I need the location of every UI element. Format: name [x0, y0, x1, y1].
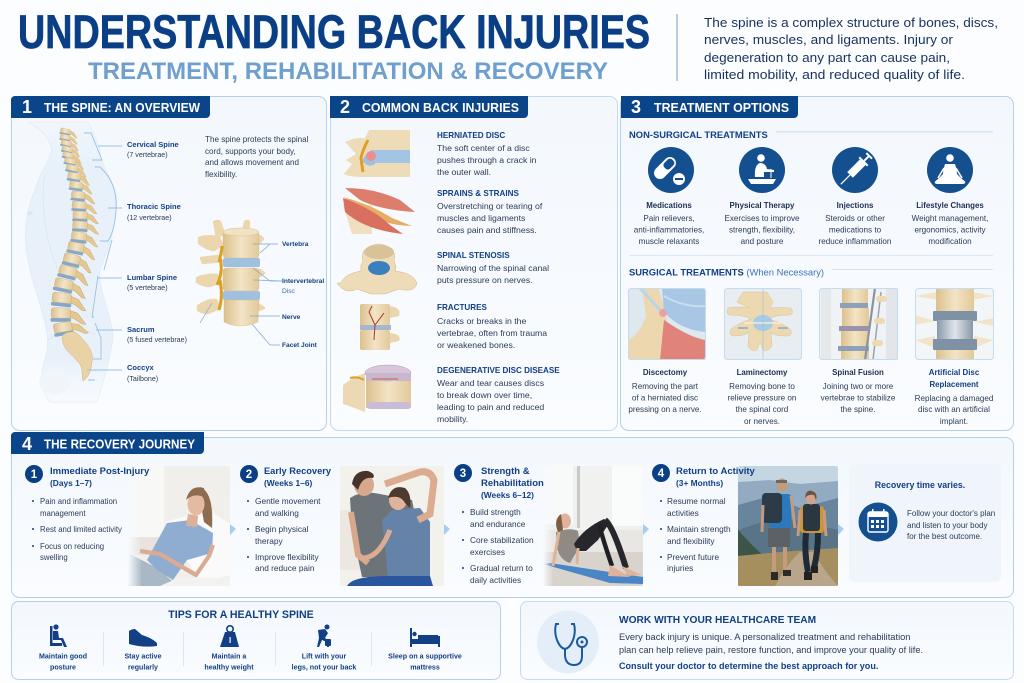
injury descriptions: HERNIATED DISC	[437, 131, 505, 140]
image: spinal fusion	[819, 288, 898, 360]
icon: fractures	[360, 304, 400, 350]
step 3 text: daily activities	[470, 575, 521, 585]
image: artificial disc replacement	[915, 288, 994, 360]
surgical descriptions	[628, 368, 993, 426]
tip: posture	[39, 624, 87, 672]
step 2 text: Begin physical	[255, 524, 309, 534]
step 3	[454, 464, 643, 586]
surgical descriptions: the spine.	[840, 405, 876, 414]
tip: posture: Maintain good	[39, 652, 87, 660]
vertebra detail labels	[200, 241, 324, 349]
tip: weight: Maintain a	[212, 652, 246, 660]
overview text: The spine protects the spinal	[205, 135, 309, 144]
icon: herniated disc	[344, 130, 410, 177]
step 2 text: Improve flexibility	[255, 552, 319, 562]
vertebra detail labels: Intervertebral	[282, 278, 324, 285]
injury descriptions: Narrowing of the spinal canal	[437, 263, 549, 273]
injury descriptions: Wear and tear causes discs	[437, 378, 545, 388]
spine region labels: (7 vertebrae)	[127, 151, 168, 159]
surgical descriptions: Spinal Fusion	[832, 368, 884, 377]
step 1	[25, 465, 232, 586]
non-surgical descriptions: ergonomics, activity	[914, 226, 986, 234]
spine region brackets	[84, 133, 122, 380]
non-surgical descriptions: Exercises to improve	[724, 214, 800, 223]
icon: physical therapy	[739, 147, 785, 193]
step 1 text: (Days 1–7)	[50, 478, 92, 488]
panel heading	[621, 96, 798, 118]
panel heading: COMMON BACK INJURIES	[362, 101, 519, 115]
surgical descriptions: Joining two or more	[823, 382, 894, 391]
step 3 text: 3	[460, 468, 466, 480]
vertebra detail labels: Vertebra	[282, 241, 309, 248]
step 3 text: and endurance	[470, 519, 526, 529]
injury descriptions: SPRAINS & STRAINS	[437, 189, 519, 198]
icon: degenerative disc disease	[343, 365, 411, 412]
non-surgical descriptions: modification	[928, 237, 972, 246]
vertebra detail labels: Disc	[282, 288, 296, 295]
spine region labels: Coccyx	[127, 363, 155, 372]
overview text	[205, 135, 309, 179]
tip: lifting: legs, not your back	[292, 664, 356, 672]
step 4 text: activities	[667, 508, 699, 518]
step 3 text: (Weeks 6–12)	[481, 490, 534, 500]
callout: recovery time varies	[849, 464, 1001, 582]
step 2 text: Gentle movement	[255, 496, 321, 506]
surgical descriptions: disc with an artificial	[918, 405, 990, 414]
icon: calendar	[858, 502, 898, 542]
panel heading	[330, 96, 528, 118]
tip: active	[124, 629, 162, 672]
injury descriptions: the outer wall.	[437, 167, 491, 177]
spine illustration	[25, 122, 117, 402]
step 2 text: Early Recovery	[264, 466, 332, 477]
spine region labels: (5 fused vertebrae)	[127, 336, 187, 344]
injury descriptions: vertebrae, often from trauma	[437, 328, 547, 338]
panel heading	[11, 96, 210, 118]
non-surgical descriptions: Steroids or other	[825, 214, 885, 223]
panel: the spine overview	[11, 96, 326, 430]
non-surgical descriptions: Pain relievers,	[643, 214, 695, 223]
panel heading: TREATMENT OPTIONS	[654, 101, 789, 115]
surgical descriptions: Replacing a damaged	[915, 394, 993, 403]
team text: Consult your doctor to determine the best approach for you.	[619, 661, 878, 671]
icon: stethoscope	[537, 610, 599, 674]
spine region labels: Sacrum	[127, 325, 155, 334]
step 3 text: Strength &	[481, 466, 530, 477]
spine region labels: Thoracic Spine	[127, 202, 181, 211]
step 1 text: 1	[31, 469, 38, 481]
injury descriptions: mobility.	[437, 414, 468, 424]
step 4 text: injuries	[667, 563, 693, 573]
step 1 text: management	[40, 509, 86, 518]
step 4 text	[652, 464, 756, 573]
icon: lifestyle changes	[927, 147, 973, 193]
intro text	[704, 15, 998, 82]
panel: work with your healthcare team	[520, 602, 1014, 680]
step 1 text	[25, 465, 150, 562]
callout: recovery time varies: Follow your doctor's plan	[907, 509, 995, 518]
step 2 text: (Weeks 1–6)	[264, 478, 312, 488]
step 4 text: Return to Activity	[676, 466, 756, 477]
injury descriptions: muscles and ligaments	[437, 213, 526, 223]
tip: mattress: Sleep on a supportive	[388, 652, 462, 660]
step 4	[652, 464, 838, 586]
step 1 text: swelling	[40, 553, 68, 562]
surgical descriptions: Discectomy	[643, 368, 688, 377]
non-surgical descriptions: muscle relaxants	[639, 237, 699, 246]
injury descriptions: or weakened bones.	[437, 340, 515, 350]
step 2	[240, 465, 444, 586]
step 4 text: Resume normal	[667, 496, 726, 506]
step 2 text: and reduce pain	[255, 563, 315, 573]
surgical descriptions: Removing the part	[632, 382, 699, 391]
surgical descriptions: of a herniated disc	[632, 394, 698, 402]
photo: glute bridge on mat	[543, 466, 643, 586]
step 2 text: and walking	[255, 508, 299, 518]
icon: injections	[832, 147, 878, 193]
non-surgical descriptions: medications to	[829, 226, 882, 234]
arrow	[643, 524, 649, 535]
arrow	[230, 524, 236, 535]
non-surgical descriptions: and posture	[741, 237, 784, 246]
step 1 text: Pain and inflammation	[40, 497, 117, 506]
step 4 text: (3+ Months)	[676, 478, 723, 488]
non-surgical descriptions: reduce inflammation	[819, 237, 891, 246]
subtitle: TREATMENT, REHABILITATION & RECOVERY	[88, 58, 608, 85]
injury descriptions: Overstretching or tearing of	[437, 201, 543, 211]
spine region labels: Lumbar Spine	[127, 273, 177, 282]
callout: recovery time varies: for the best outcome.	[907, 532, 982, 541]
step 2 text: therapy	[255, 536, 284, 546]
surgical descriptions: Removing bone to	[729, 382, 795, 391]
injury descriptions: puts pressure on nerves.	[437, 275, 533, 285]
panel heading: THE SPINE: AN OVERVIEW	[44, 101, 200, 115]
injury descriptions: DEGENERATIVE DISC DISEASE	[437, 366, 560, 375]
surgical descriptions: the spinal cord	[736, 405, 788, 414]
panel: the recovery journey	[11, 432, 1014, 598]
non-surgical descriptions	[634, 201, 988, 246]
injury descriptions: Cracks or breaks in the	[437, 316, 526, 326]
non-surgical descriptions: Physical Therapy	[730, 201, 795, 210]
tip: mattress	[388, 628, 462, 672]
tip: active: regularly	[128, 664, 158, 672]
tips heading: TIPS FOR A HEALTHY SPINE	[168, 609, 314, 621]
injury descriptions: FRACTURES	[437, 303, 488, 312]
surgical descriptions: Replacement	[929, 380, 979, 389]
overview text: and allows movement and	[205, 158, 299, 167]
step 4 text: Maintain strength	[667, 524, 731, 534]
spine region labels: (5 vertebrae)	[127, 284, 168, 292]
non-surgical descriptions: Injections	[837, 201, 874, 210]
intro text: The spine is a complex structure of bones, discs,	[704, 15, 998, 30]
step 2 text	[240, 465, 332, 573]
surgical descriptions: Laminectomy	[737, 368, 788, 377]
step 1 text: Rest and limited activity	[40, 525, 122, 534]
injury descriptions: to break down over time,	[437, 390, 532, 400]
surgical heading: SURGICAL TREATMENTS (When Necessary)	[629, 266, 824, 278]
step 4 text: and flexibility	[667, 536, 715, 546]
team text: Every back injury is unique. A personalized treatment and rehabilitation	[619, 632, 910, 642]
panel: treatment options	[620, 96, 1014, 430]
callout: recovery time varies: Recovery time varies.	[875, 480, 965, 490]
tip: mattress: mattress	[410, 664, 440, 672]
panel heading: 2	[340, 97, 350, 117]
image: laminectomy	[724, 288, 802, 360]
tip: weight	[204, 626, 254, 672]
non-surgical descriptions: Medications	[646, 201, 692, 210]
icon: medications	[648, 147, 694, 193]
step 3 text: exercises	[470, 547, 505, 557]
overview text: flexibility.	[205, 170, 237, 179]
step 3 text: Build strength	[470, 507, 521, 517]
intro text: limited mobility, and reduced quality of life.	[704, 67, 965, 82]
team text: WORK WITH YOUR HEALTHCARE TEAM	[619, 615, 816, 626]
photo: resting in bed	[128, 466, 232, 586]
step 4 text: Prevent future	[667, 552, 720, 562]
callout: recovery time varies: and listen to your body	[907, 521, 988, 530]
surgical descriptions: relieve pressure on	[728, 394, 796, 402]
panel heading: 1	[22, 97, 32, 117]
panel heading: THE RECOVERY JOURNEY	[44, 438, 196, 452]
step 1 text: Focus on reducing	[40, 542, 104, 551]
intro text: nerves, muscles, and ligaments. Injury or	[704, 32, 954, 47]
surgical descriptions: pressing on a nerve.	[628, 405, 702, 414]
non-surgical heading: NON-SURGICAL TREATMENTS	[629, 129, 768, 140]
step 3 text	[454, 464, 544, 585]
tip: lifting: Lift with your	[302, 652, 347, 660]
injury descriptions: pushes through a crack in	[437, 155, 537, 165]
photo: therapist stretching patient	[340, 466, 444, 586]
injury descriptions	[437, 131, 560, 424]
injury descriptions: SPINAL STENOSIS	[437, 251, 510, 260]
non-surgical descriptions: strength, flexibility,	[729, 226, 795, 234]
intro text: degeneration to any part can cause pain,	[704, 50, 950, 65]
step 4 text: 4	[658, 468, 665, 480]
tip: active: Stay active	[124, 652, 162, 660]
icon: sprains and strains	[343, 188, 415, 234]
arrow	[444, 524, 450, 535]
team text	[619, 615, 923, 671]
tip: posture: posture	[50, 664, 76, 672]
panel heading	[11, 432, 204, 454]
spine region labels: Cervical Spine	[127, 140, 179, 149]
tip: lifting	[292, 624, 356, 672]
arrow	[838, 524, 844, 535]
panel heading: 3	[631, 97, 641, 117]
overview text: cord, supports your body,	[205, 147, 296, 156]
surgical descriptions: Artificial Disc	[929, 368, 980, 377]
panel: tips for a healthy spine	[12, 602, 500, 680]
non-surgical descriptions: anti-inflammatories,	[634, 226, 704, 234]
spine region labels: (12 vertebrae)	[127, 214, 172, 222]
step 3 text: Gradual return to	[470, 563, 533, 573]
surgical descriptions: vertebrae to stabilize	[821, 394, 896, 402]
image: discectomy	[628, 288, 706, 360]
surgical descriptions: or nerves.	[744, 417, 780, 426]
photo: hikers on trail	[738, 466, 838, 586]
panel heading: 4	[22, 434, 32, 454]
tip: weight: healthy weight	[204, 664, 254, 672]
injury descriptions: leading to pain and reduced	[437, 402, 544, 412]
step 1 text: Immediate Post-Injury	[50, 466, 150, 477]
header	[18, 5, 998, 85]
step 2 text: 2	[246, 469, 252, 481]
step 3 text: Rehabilitation	[481, 478, 544, 489]
injury descriptions: causes pain and stiffness.	[437, 225, 537, 235]
vertebra detail illustration	[197, 221, 264, 326]
injury descriptions: The soft center of a disc	[437, 143, 530, 153]
vertebra detail labels: Facet Joint	[282, 342, 318, 349]
team text: plan can help relieve pain, restore function, and improve your quality of life.	[619, 645, 923, 655]
spine region labels	[127, 140, 187, 383]
spine region labels: (Tailbone)	[127, 375, 158, 383]
step 3 text: Core stabilization	[470, 535, 534, 545]
non-surgical descriptions: Lifestyle Changes	[916, 201, 984, 210]
non-surgical descriptions: Weight management,	[912, 214, 988, 223]
panel: common back injuries	[330, 96, 618, 430]
title: UNDERSTANDING BACK INJURIES	[18, 5, 650, 58]
icon: spinal stenosis	[337, 244, 417, 294]
vertebra detail labels: Nerve	[282, 314, 301, 321]
surgical descriptions: implant.	[940, 417, 968, 426]
